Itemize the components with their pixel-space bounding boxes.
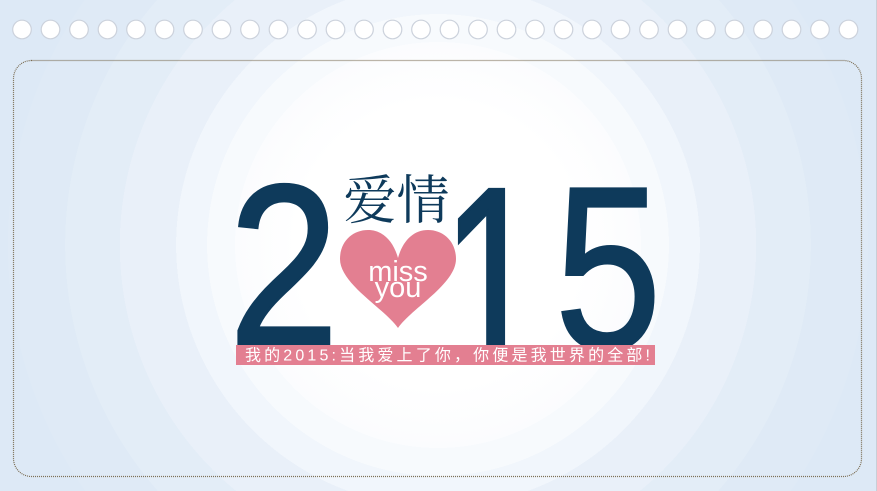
icon: heart	[340, 230, 456, 328]
text: miss: miss	[368, 256, 428, 288]
banner text: 我的2015:当我爱上了你，你便是我世界的全部!	[245, 346, 650, 364]
heart with miss you	[340, 230, 456, 328]
digit 2: 2	[229, 137, 339, 394]
banner background	[236, 345, 655, 365]
heading: 爱情: 爱情	[344, 172, 450, 230]
tagline banner	[236, 345, 655, 365]
digit 1: 1	[442, 133, 543, 429]
binder holes	[13, 20, 858, 39]
text: you: you	[375, 272, 421, 304]
digit 5: 5	[555, 139, 661, 397]
